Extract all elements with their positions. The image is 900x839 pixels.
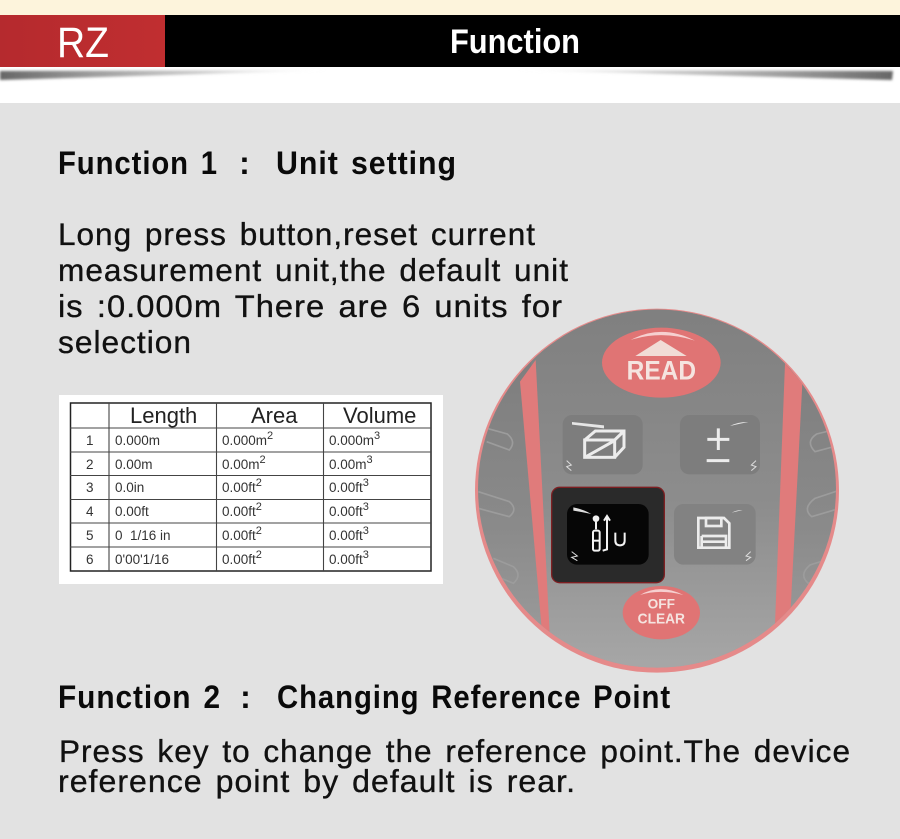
unit table: 3	[363, 549, 369, 561]
text block: function 2 description: Press key to change the reference point.The device	[59, 733, 851, 769]
unit table	[59, 395, 443, 584]
text block: function 1 description: measurement unit,the default unit	[58, 252, 569, 288]
unit table: 0.00ft	[329, 504, 363, 519]
unit table: 0.00ft	[115, 504, 149, 519]
unit table: 2	[256, 501, 262, 513]
highlighted unit key	[552, 487, 664, 583]
box measure key	[563, 415, 643, 474]
unit table: 0.00ft	[329, 552, 363, 567]
OFF CLEAR button	[623, 586, 700, 639]
unit table: 0.00m	[222, 457, 260, 472]
text block: function 1 description: is :0.000m There are 6 units for	[58, 288, 563, 324]
unit table: 4	[86, 504, 94, 519]
text block: function 1 description: Long press button,reset current	[58, 216, 536, 252]
text block: function 1 description: selection	[58, 324, 192, 360]
text block: function 1 description	[58, 216, 569, 360]
unit table: 0.000m	[222, 433, 267, 448]
heading: function 1: Function 1	[58, 145, 218, 181]
device body circle	[475, 309, 839, 673]
header bar	[0, 15, 900, 67]
device button panel	[470, 300, 847, 677]
unit table: 0.00m	[329, 457, 367, 472]
heading: function 2: Function 2	[58, 679, 221, 715]
grip ridges	[478, 428, 840, 583]
side grips	[470, 300, 847, 677]
heading: function 1: :	[239, 145, 251, 181]
heading: function 2: Changing Reference Point	[277, 679, 671, 715]
unit table: 0.0in	[115, 480, 144, 495]
unit table: 2	[256, 549, 262, 561]
unit table: 3	[363, 477, 369, 489]
unit table: 0.00ft	[222, 552, 256, 567]
OFF CLEAR button: CLEAR	[638, 612, 686, 628]
heading: function 2	[58, 679, 671, 715]
unit table: 2	[260, 454, 266, 466]
OFF CLEAR button: OFF	[648, 595, 675, 611]
unit table: 0.000m	[329, 433, 374, 448]
READ button: READ	[627, 355, 696, 385]
unit table: 0.00ft	[222, 504, 256, 519]
white band under header	[0, 67, 900, 103]
top cream strip	[0, 0, 900, 15]
header shadow	[0, 70, 893, 80]
save key	[674, 504, 756, 565]
unit table: 2	[256, 477, 262, 489]
heading: function 1	[58, 145, 457, 181]
unit table: 3	[363, 525, 369, 537]
unit table: 2	[256, 525, 262, 537]
red side stripes	[520, 360, 550, 640]
unit table: 3	[363, 501, 369, 513]
unit table: 0.00ft	[329, 480, 363, 495]
unit table: Length	[130, 403, 197, 428]
unit table: 0.00ft	[222, 480, 256, 495]
unit table: 5	[86, 528, 94, 543]
header title: Function	[450, 23, 580, 61]
center body	[528, 300, 795, 677]
text block: function 2 description: reference point by default is rear.	[58, 763, 576, 799]
unit table: 3	[86, 480, 94, 495]
text block: function 2 description	[58, 733, 851, 799]
unit table: 0'00'1/16	[115, 552, 169, 567]
unit table: 0.00ft	[222, 528, 256, 543]
unit table: 2	[86, 457, 94, 472]
unit table: 6	[86, 552, 94, 567]
brand block	[0, 15, 165, 67]
unit table: 3	[374, 430, 380, 442]
brand text: RZ	[57, 19, 109, 67]
unit table: Area	[251, 403, 298, 428]
unit table: 1	[86, 433, 94, 448]
unit table: 0.000m	[115, 433, 160, 448]
heading: function 2: :	[240, 679, 252, 715]
unit table: 3	[367, 454, 373, 466]
heading: function 1: Unit setting	[276, 145, 457, 181]
unit table: Volume	[343, 403, 416, 428]
READ button	[602, 328, 721, 398]
plus minus key	[680, 415, 760, 474]
unit table: 0 1/16 in	[115, 528, 171, 543]
unit table: 0.00m	[115, 457, 153, 472]
unit table: 2	[267, 430, 273, 442]
unit table: 0.00ft	[329, 528, 363, 543]
